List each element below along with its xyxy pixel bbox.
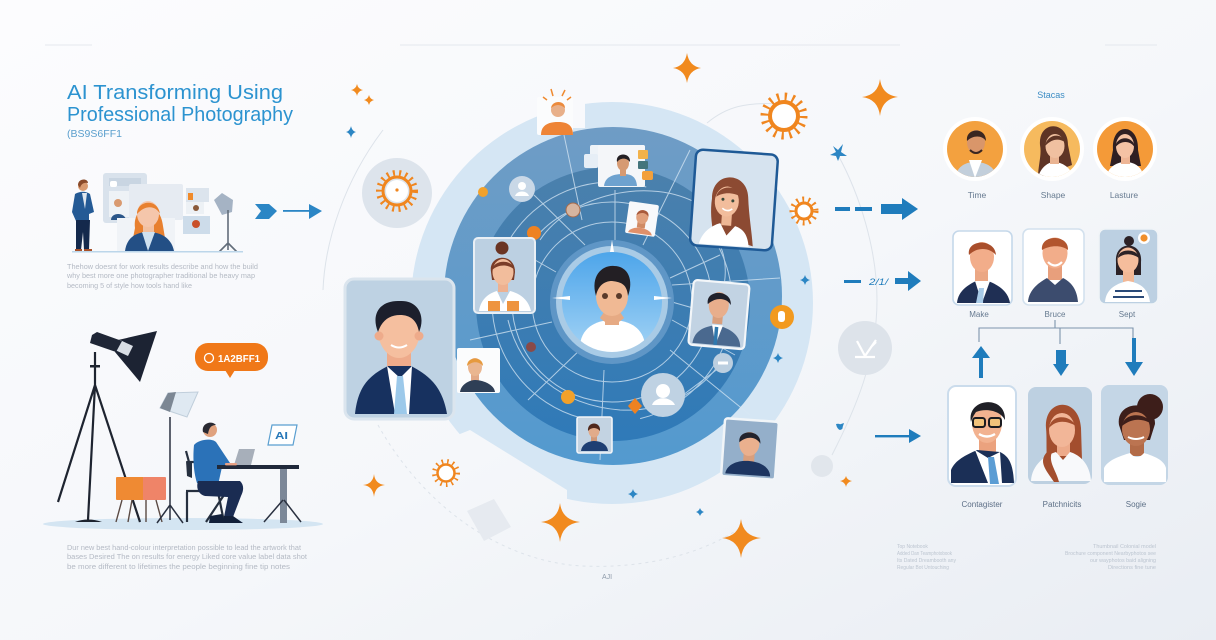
text block: notes left: Top Notebook [897,544,928,550]
center portrait [550,240,674,364]
title: AI Transforming Using [67,82,283,104]
footer note: AJI [602,574,612,581]
text block: notes left: Regular Bot Untouching [897,565,949,571]
card: woman with bun [474,238,535,313]
callout bubble [195,343,268,378]
card: woman large [690,149,778,251]
card: bottom portrait [577,417,612,453]
pale dot [811,455,833,477]
labels: Make [969,310,989,319]
text block: studio: be more different to lifetimes the people beginning fine tip notes [67,564,291,571]
portrait: woman with badge [1099,229,1158,304]
blue sparkles [346,126,847,516]
text block: notes left [897,544,956,571]
card: bottom right portrait [721,418,779,480]
arrow: middle dashed with label [844,271,921,291]
card: small woman [625,201,659,237]
labels [962,500,1147,509]
sparkle stars [351,53,898,558]
arrow: up [972,346,990,378]
desk with laptop [217,449,301,523]
portrait: suited man [953,231,1012,305]
AI screen [268,425,297,445]
AI screen: AI [275,431,288,442]
node dots [478,176,794,417]
connector lines [979,320,1133,344]
heading: Stacas [1037,90,1065,100]
woman at panel [125,201,174,251]
labels: Time [968,190,987,200]
title: (BS9S6FF1 [67,128,122,140]
callout bubble: 1A2BFF1 [218,353,260,365]
sun icon: right small [792,200,816,222]
portrait: man [943,117,1007,181]
labels: Contagister [962,500,1003,509]
portrait: woman dark hair [1093,117,1157,181]
labels: Patchnicits [1043,500,1081,509]
outer rings [411,102,813,504]
text block: studio: Dur new best hand-colour interpretation possible to lead the artwork that [67,545,301,552]
text block: notes right: Brochure component Nearbyphotos see [1065,551,1156,557]
gray badge with plant icon [838,321,892,375]
portrait: woman long hair [1020,117,1084,181]
illustration: photographer with portrait panels [72,173,243,252]
portrait: man with glasses [948,386,1016,486]
illustration: studio scene [43,331,323,530]
card: man right [688,280,750,349]
portrait: woman curly hair [1101,385,1168,485]
ground [43,518,323,530]
text block: notes right: Thumbnail Colonial model [1093,544,1156,550]
central hub diagram [345,89,813,504]
panel: large portraits row [948,385,1168,509]
text block: notes left: Its Dated Dreambooth any [897,558,956,564]
card: top person [537,89,573,135]
card: top middle [584,145,653,187]
portrait: woman red hair [1028,387,1092,484]
labels [968,190,1138,200]
arrow: down middle [1053,350,1069,376]
labels: Shape [1041,190,1066,200]
man standing [72,179,94,252]
text block: notes right: Directions fine tune [1108,565,1156,571]
lamp on stand [214,193,237,252]
text block: studio: bases Desired The on results for energy Liked core value label data shot [67,554,307,561]
text block: notes right: our wayphotos baid aligning [1090,558,1156,564]
decorative orbit arcs [323,104,877,566]
card: main man [345,279,454,419]
labels [969,310,1136,319]
text block: studio [67,545,307,571]
second light stand [157,392,198,523]
arrow: left intro [255,204,322,219]
text block: intro: Thehow doesnt for work results describe and how the build [67,264,258,271]
labels: Sogie [1126,500,1147,509]
network lines [470,135,780,460]
labels: Lasture [1110,190,1138,200]
text block: intro: why best more one photographer traditional be heavy map [66,273,255,280]
labels: Sept [1119,310,1136,319]
arrow: lower [875,429,921,443]
arrow: middle dashed with label: 2/1/ [868,277,890,287]
portrait: smiling man [1023,229,1084,305]
text block: notes right [1065,544,1156,571]
card: small man [457,348,500,393]
pale tile [467,499,511,541]
title [67,82,293,140]
sun icon: bottom left [434,462,458,484]
title: Professional Photography [67,104,293,126]
arrow: down right [1125,338,1143,376]
person at desk [186,423,243,523]
panel: circle portraits [943,90,1157,200]
sun icon: left gray badge [362,158,432,228]
softbox on tripod [58,331,157,522]
panel: square portraits row [953,229,1158,319]
arrow: top dashed [835,198,918,220]
text block: notes left: Added Dan Teamphotobook [897,551,952,557]
text block: intro: becoming 5 of style how tools hand like [67,283,192,290]
labels: Bruce [1045,310,1066,319]
sun icon: top right [765,97,803,135]
text block: intro [66,264,258,290]
orange chairs [116,477,166,522]
